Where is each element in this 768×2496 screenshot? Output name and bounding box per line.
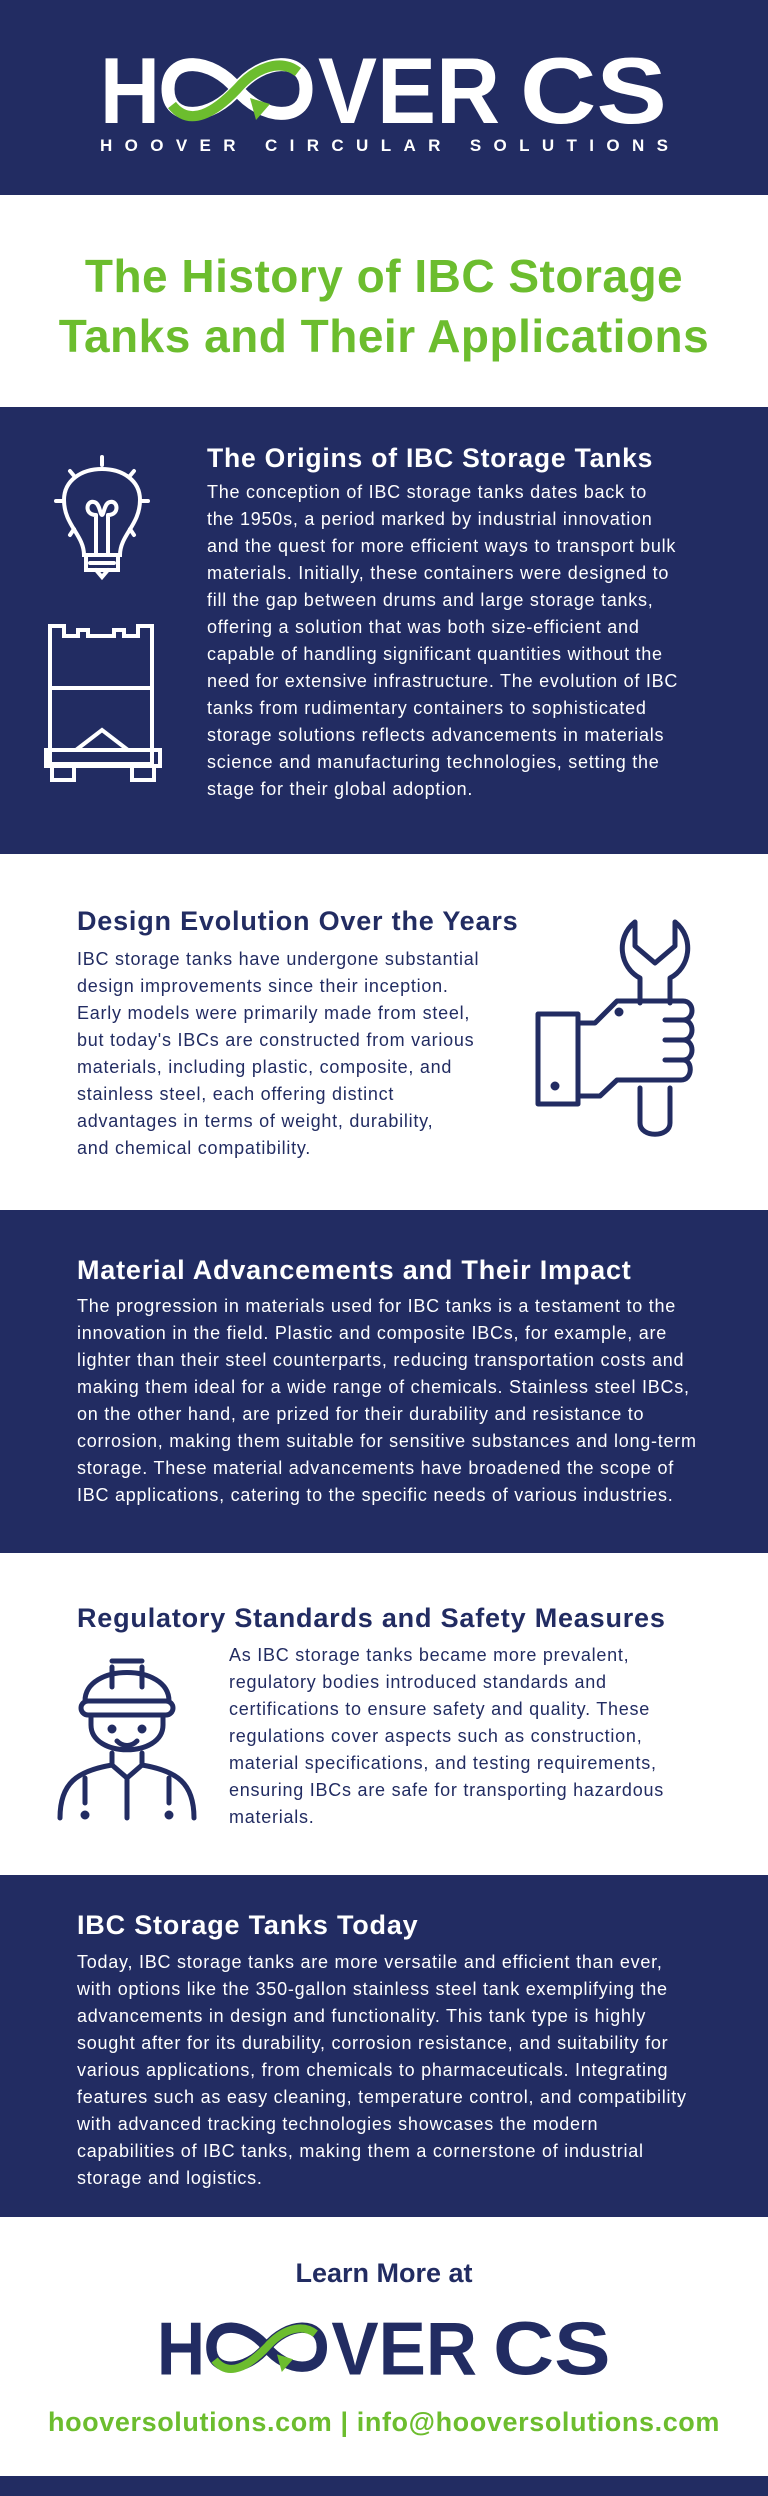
text: regulatory body: As IBC storage tanks became more prevalent, [229, 1645, 629, 1665]
text: design body: design improvements since their inception. [77, 976, 449, 996]
header band [0, 0, 768, 195]
panel: regulatory [58, 1603, 666, 1827]
text: material body: The progression in materials used for IBC tanks is a testament to the [77, 1296, 676, 1316]
text: design body [77, 949, 479, 1158]
text: design body: and chemical compatibility. [77, 1138, 311, 1158]
heading: regulatory: Regulatory Standards and Safety Measures [77, 1603, 666, 1633]
text: design body: but today's IBCs are constructed from various [77, 1030, 474, 1050]
text: origins body: need for extensive infrastructure. The evolution of IBC [207, 671, 678, 691]
text: design body: stainless steel, each offering distinct [77, 1084, 394, 1104]
footer logo: VER [331, 2306, 477, 2390]
text: material body: making them ideal for a wide range of chemicals. Stainless steel IBCs, [77, 1377, 690, 1397]
footer logo: H [157, 2306, 205, 2390]
text: material body: lighter than their steel counterparts, reducing transportation costs and [77, 1350, 684, 1370]
footer: learn more: Learn More at [295, 2258, 473, 2288]
text: today body: features such as easy cleaning, temperature control, and compatibility [77, 2087, 687, 2107]
text: regulatory body [229, 1645, 664, 1827]
panel: design evolution [77, 906, 694, 1158]
text: material body: corrosion, making them suitable for sensitive substances and long-term [77, 1431, 697, 1451]
text: origins body [207, 482, 678, 799]
logo: HOOVER CS: CS [520, 38, 667, 143]
text: today body: capabilities of IBC tanks, making them a cornerstone of industrial [77, 2141, 644, 2161]
panel: origins [0, 407, 768, 854]
text: today body: Today, IBC storage tanks are more versatile and efficient than ever, [77, 1952, 663, 1972]
logo: HOOVER CS [100, 38, 668, 155]
title [59, 250, 709, 362]
logo: HOOVER CS: HOOVER CIRCULAR SOLUTIONS [100, 136, 668, 155]
text: design body: advantages in terms of weight, durability, [77, 1111, 433, 1131]
text: material body: innovation in the field. Plastic and composite IBCs, for example, are [77, 1323, 667, 1343]
text: origins body: storage solutions reflects advancements in materials [207, 725, 664, 745]
text: today body: advancements in design and functionality. This tank type is highly [77, 2006, 646, 2026]
text: regulatory body: ensuring IBCs are safe for transporting hazardous [229, 1780, 664, 1800]
text: regulatory body: regulations cover aspects such as construction, [229, 1726, 642, 1746]
text: origins body: The conception of IBC storage tanks dates back to [207, 482, 647, 502]
text: design body: Early models were primarily made from steel, [77, 1003, 470, 1023]
heading: design evolution: Design Evolution Over the Years [77, 906, 518, 936]
text: origins body: materials. Initially, these containers were designed to [207, 563, 669, 583]
logo: HOOVER CS: VER [318, 38, 500, 143]
text: today body: with options like the 350-gallon stainless steel tank exemplifying the [77, 1979, 668, 1999]
text: origins body: and the quest for more efficient ways to transport bulk [207, 536, 676, 556]
text: today body: various applications, from chemicals to pharmaceuticals. Integrating [77, 2060, 668, 2080]
bottom band [0, 2476, 768, 2496]
footer logo [157, 2306, 611, 2390]
text: origins body: the 1950s, a period marked by industrial innovation [207, 509, 652, 529]
heading: today: IBC Storage Tanks Today [77, 1910, 418, 1940]
title: Tanks and Their Applications [59, 310, 709, 362]
text: material body: IBC applications, catering to the specific needs of various industries. [77, 1485, 674, 1505]
text: today body: storage and logistics. [77, 2168, 263, 2188]
text: origins body: offering a solution that was both size-efficient and [207, 617, 640, 637]
icon: hand with wrench [536, 920, 694, 1137]
footer logo: CS [493, 2306, 611, 2390]
text: material body: on the other hand, are prized for their durability and resistance to [77, 1404, 644, 1424]
heading: origins: The Origins of IBC Storage Tanks [207, 443, 653, 473]
text: origins body: tanks from rudimentary containers to sophisticated [207, 698, 647, 718]
text: material body [77, 1296, 697, 1505]
logo: HOOVER CS: H [100, 38, 160, 143]
text: design body: materials, including plastic, composite, and [77, 1057, 452, 1077]
text: today body [77, 1952, 687, 2188]
footer: links: hooversolutions.com | info@hooversolutions.com [48, 2407, 720, 2437]
text: origins body: fill the gap between drums and large storage tanks, [207, 590, 654, 610]
text: origins body: stage for their global adoption. [207, 779, 473, 799]
text: regulatory body: certifications to ensure safety and quality. These [229, 1699, 650, 1719]
text: today body: with advanced tracking technologies showcases the modern [77, 2114, 598, 2134]
icon: IBC tank [44, 624, 162, 782]
text: regulatory body: regulatory bodies introduced standards and [229, 1672, 607, 1692]
text: origins body: science and manufacturing technologies, setting the [207, 752, 660, 772]
panel: material advancements [0, 1210, 768, 1553]
text: regulatory body: materials. [229, 1807, 315, 1827]
icon: lightbulb [54, 455, 150, 580]
text: regulatory body: material specifications, and testing requirements, [229, 1753, 657, 1773]
panel: today [0, 1875, 768, 2217]
text: material body: storage. These material advancements have broadened the scope of [77, 1458, 674, 1478]
text: design body: IBC storage tanks have undergone substantial [77, 949, 479, 969]
text: origins body: capable of handling significant quantities without the [207, 644, 663, 664]
title: The History of IBC Storage [85, 250, 683, 302]
heading: material advancements: Material Advancements and Their Impact [77, 1255, 632, 1285]
text: today body: sought after for its durability, corrosion resistance, and suitability for [77, 2033, 668, 2053]
icon: worker [58, 1658, 196, 1820]
